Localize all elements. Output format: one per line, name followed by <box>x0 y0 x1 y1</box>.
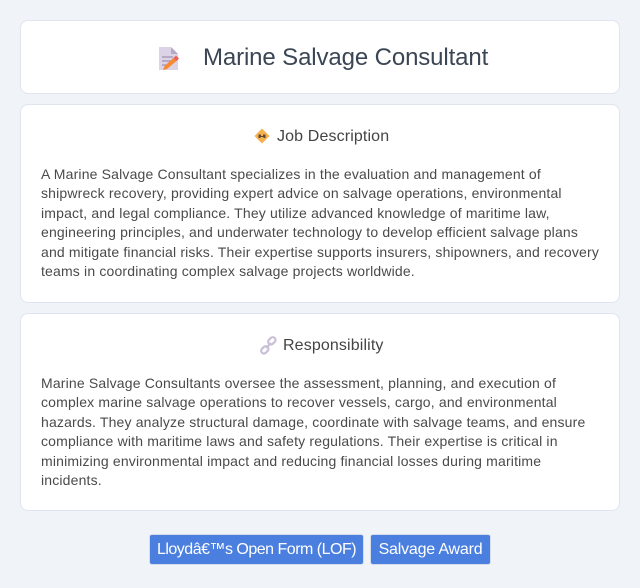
tag: Lloyd's Open Form: Lloydâ€™s Open Form (LOF) <box>157 541 356 558</box>
panel: job description <box>20 104 620 303</box>
text: job description: impact, and legal compliance. They utilize advanced knowledge of maritime law, <box>41 205 550 221</box>
icon: chain link <box>260 336 276 355</box>
panel: responsibility <box>20 313 620 511</box>
tag: Lloyd's Open Form <box>150 535 363 564</box>
tag: Salvage Award <box>371 535 490 564</box>
icon: diamond sign <box>254 128 270 144</box>
text: responsibility <box>41 375 585 488</box>
text: responsibility: complex marine salvage operations to recover vessels, cargo, and environmental <box>41 394 557 410</box>
text: responsibility: minimizing environmental impact and reducing financial losses during maritime <box>41 453 541 469</box>
heading: responsibility: Responsibility <box>283 337 384 354</box>
text: job description <box>41 166 599 279</box>
text: responsibility: Marine Salvage Consultants oversee the assessment, planning, and execution of <box>41 375 556 391</box>
heading: job description: Job Description <box>277 128 389 145</box>
text: job description: A Marine Salvage Consultant specializes in the evaluation and management of <box>41 166 541 182</box>
text: responsibility: incidents. <box>41 472 102 488</box>
text: job description: engineering principles, and underwater technology to develop efficient salvage plans <box>41 224 578 240</box>
title: Marine Salvage Consultant <box>203 44 488 71</box>
text: job description: and mitigate financial risks. Their expertise supports insurers, shipowners, and recovery <box>41 244 599 260</box>
text: job description: shipwreck recovery, providing expert advice on salvage operations, environmental <box>41 185 562 201</box>
panel: title card <box>20 20 620 94</box>
text: job description: teams in coordinating complex salvage projects worldwide. <box>41 263 415 279</box>
icon: document with pencil <box>159 47 179 70</box>
text: responsibility: compliance with maritime laws and safety regulations. Their expertise is critical in <box>41 433 558 449</box>
text: responsibility: hazards. They analyze structural damage, coordinate with salvage teams, and ensure <box>41 414 585 430</box>
tag: Salvage Award: Salvage Award <box>379 541 482 558</box>
